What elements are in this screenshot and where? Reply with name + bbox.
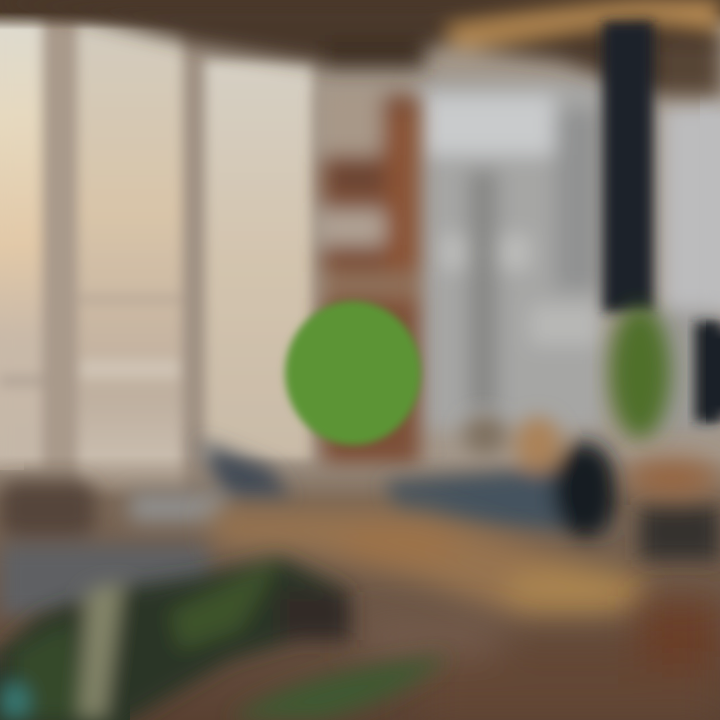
left edge window base xyxy=(0,0,24,470)
city windows on the right xyxy=(415,80,720,430)
wooden tables xyxy=(210,460,720,618)
green circle xyxy=(285,301,421,445)
windows on the left xyxy=(0,0,312,495)
dark screen at right edge xyxy=(695,318,720,426)
ceiling xyxy=(0,0,720,95)
ceiling base xyxy=(0,0,720,30)
bookshelf xyxy=(322,90,420,465)
dark column xyxy=(603,22,653,312)
sofa and cushions xyxy=(0,415,720,615)
floor xyxy=(0,455,720,720)
hardwood floor xyxy=(360,600,720,720)
foreground plant xyxy=(0,558,450,720)
foreground plant base xyxy=(0,640,130,720)
plant behind the sofa, right xyxy=(610,306,670,438)
right edge window base xyxy=(700,90,720,330)
